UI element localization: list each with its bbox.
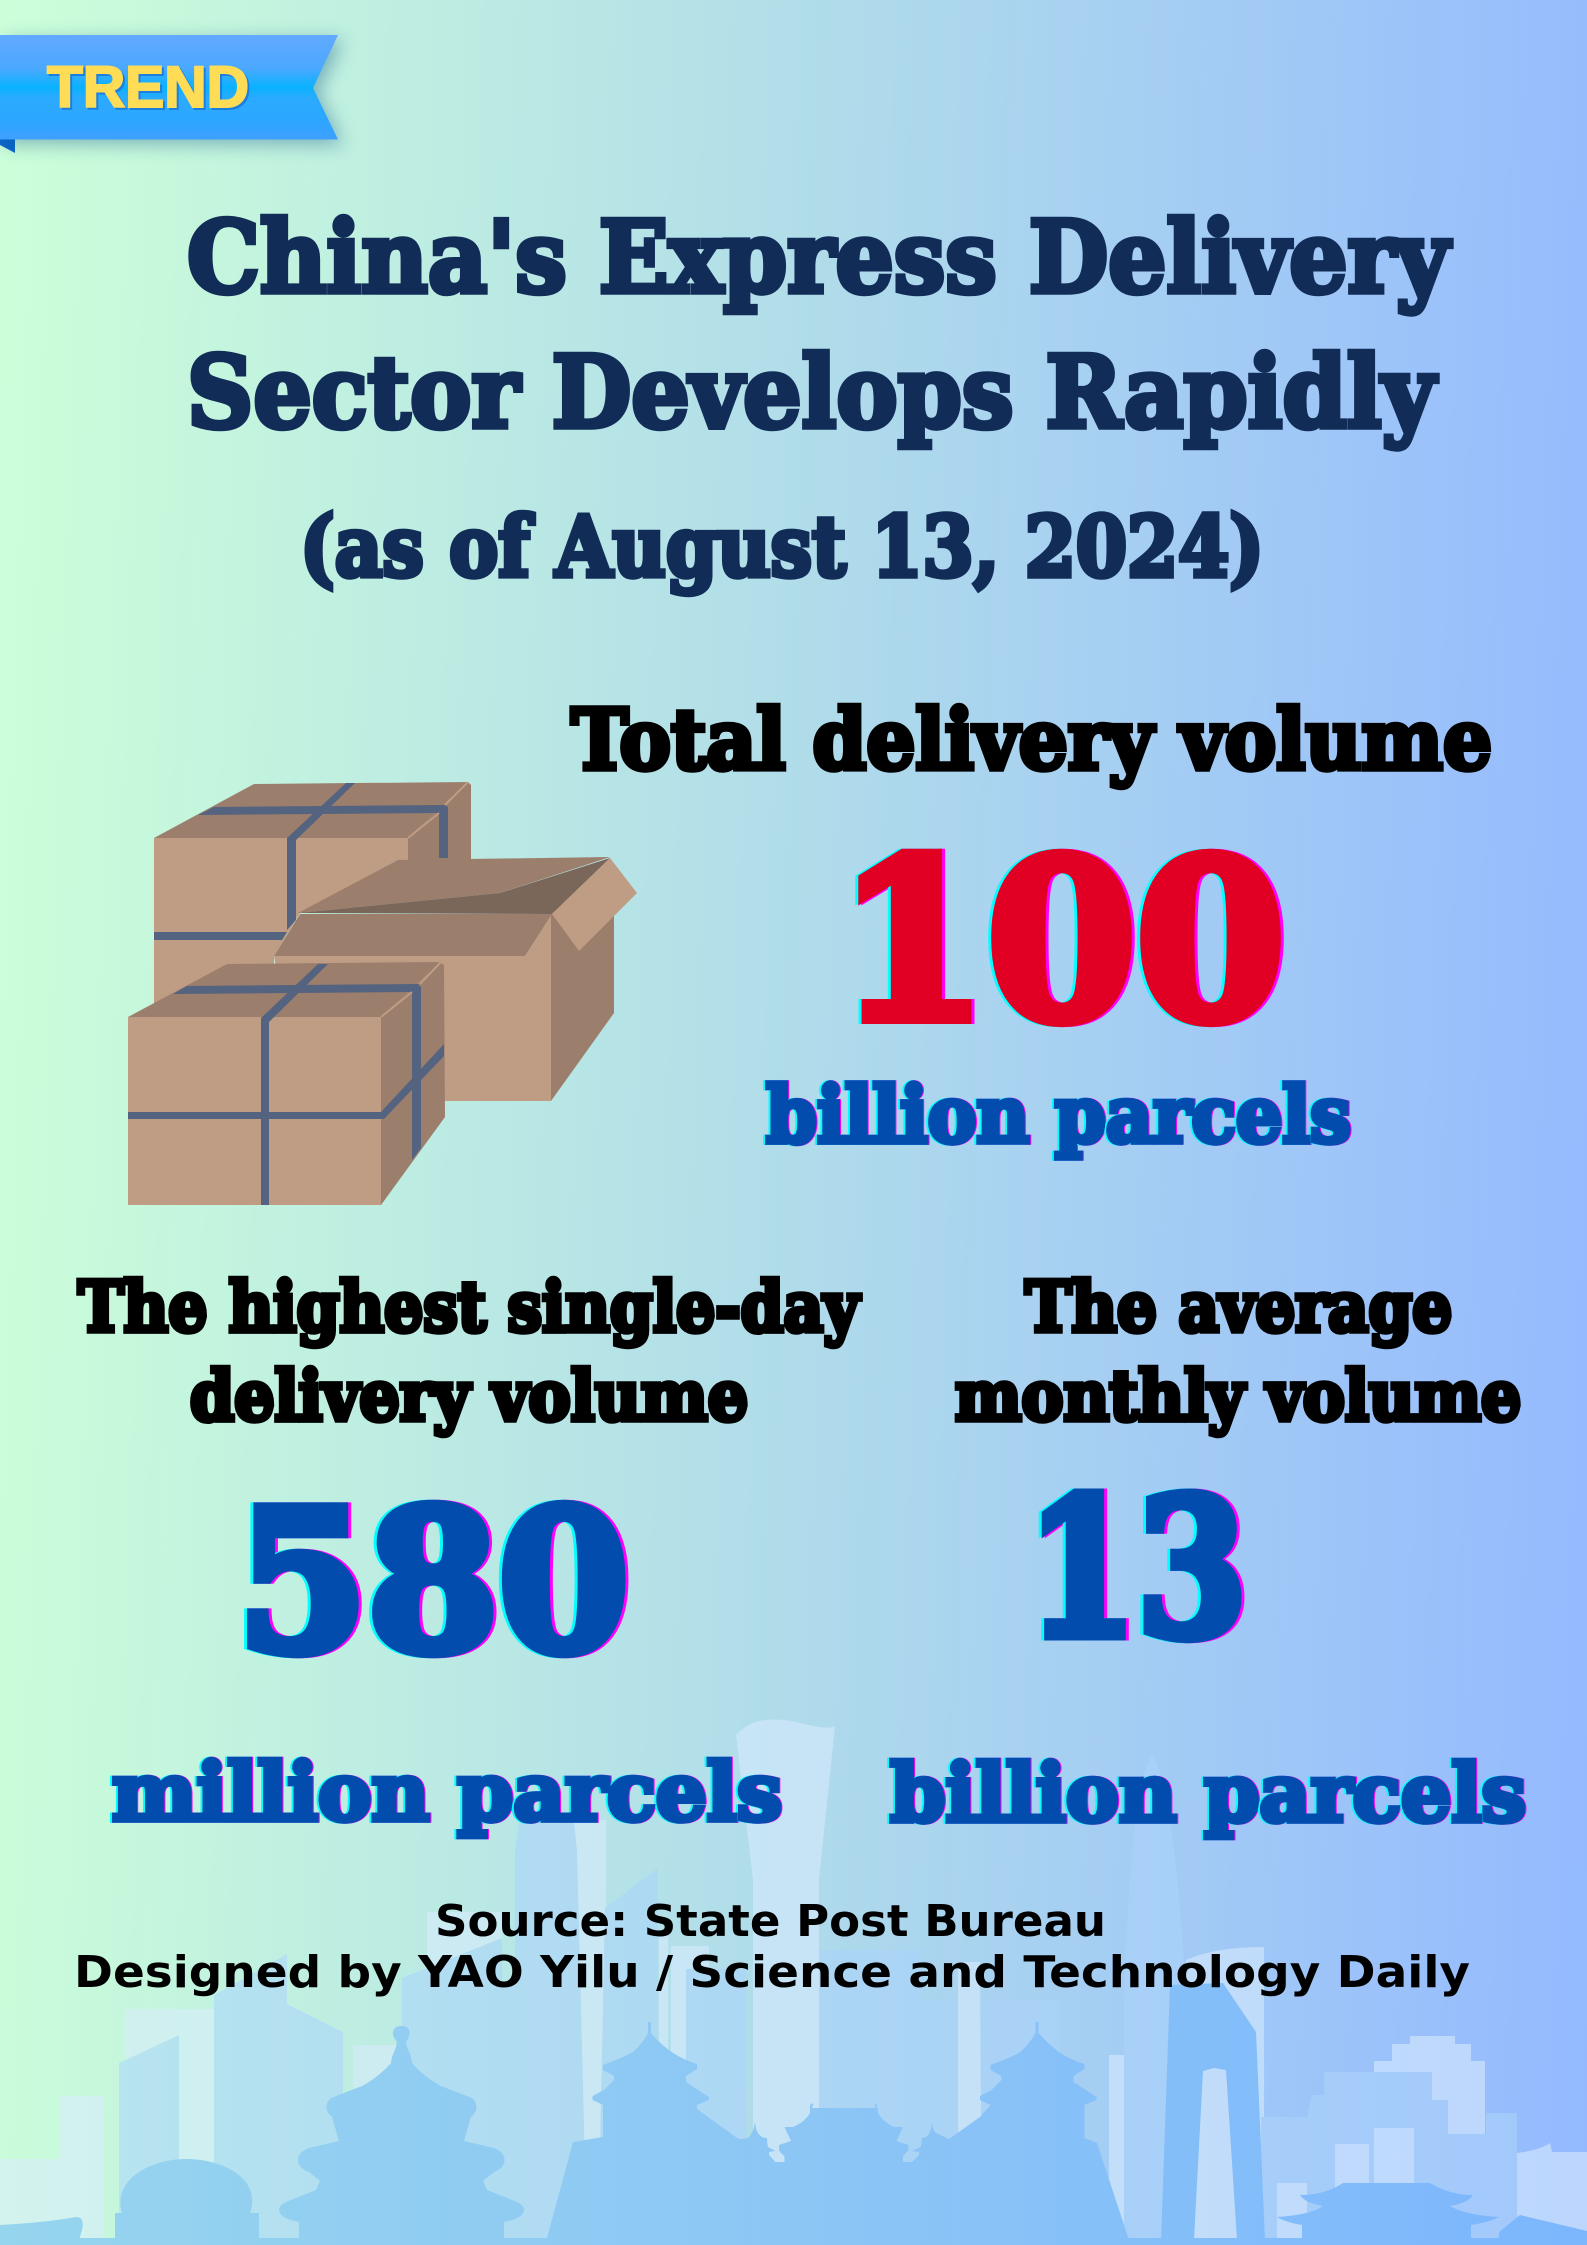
title line 2: Sector Develops Rapidly <box>187 335 1437 451</box>
ribbon label: TREND <box>47 55 249 120</box>
title line 1: China's Express Delivery <box>187 200 1451 316</box>
label: Total delivery volume <box>571 691 1492 789</box>
title <box>187 200 1451 596</box>
unit: million parcels <box>112 1745 782 1839</box>
number 580: 580 <box>237 1467 629 1696</box>
ribbon tail <box>0 139 15 153</box>
ribbon band <box>0 35 338 140</box>
open box <box>274 857 637 1101</box>
icon: cardboard boxes <box>128 782 637 1205</box>
number 13: 13 <box>1027 1457 1247 1680</box>
trend ribbon <box>0 35 338 153</box>
skyline background <box>0 1720 1587 2245</box>
designer line: Designed by YAO Yilu / Science and Technology Daily <box>74 1947 1470 1998</box>
label line 2: monthly volume <box>955 1356 1521 1437</box>
source line: Source: State Post Bureau <box>435 1896 1106 1947</box>
stat: highest single-day delivery volume <box>78 1267 861 1839</box>
stat: average monthly volume <box>890 1267 1526 1840</box>
pale far buildings <box>0 1720 1485 2245</box>
back box <box>154 782 471 1003</box>
source and credit <box>74 1896 1470 1998</box>
front box <box>128 962 445 1205</box>
front landmarks silhouette <box>0 1983 1587 2245</box>
unit: billion parcels <box>890 1746 1526 1840</box>
label line 2: delivery volume <box>190 1356 748 1437</box>
pale windows and low blocks <box>1277 2128 1587 2245</box>
label line 1: The average <box>1025 1267 1452 1348</box>
stat: total delivery volume <box>571 691 1492 1161</box>
number 100: 100 <box>838 811 1285 1070</box>
mid buildings <box>119 1754 1517 2245</box>
label line 1: The highest single-day <box>78 1267 861 1348</box>
date subtitle: (as of August 13, 2024) <box>300 498 1264 596</box>
unit: billion parcels <box>766 1070 1351 1161</box>
